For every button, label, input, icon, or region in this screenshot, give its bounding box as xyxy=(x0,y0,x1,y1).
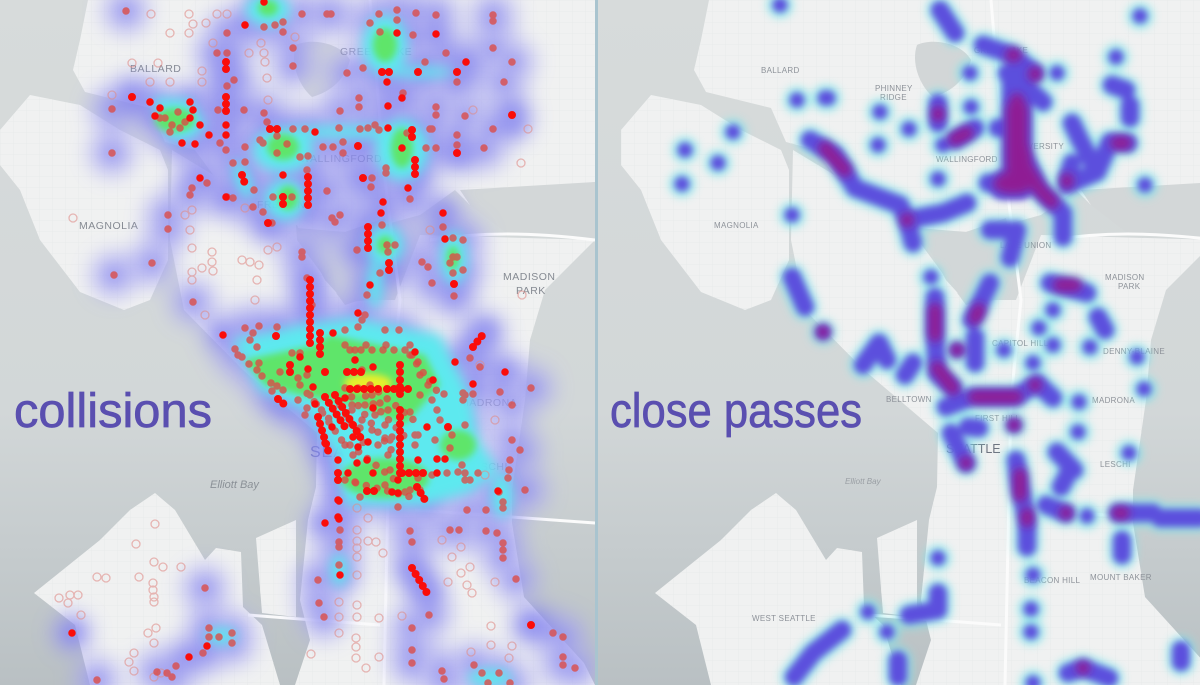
map place labels right: PHINNEY xyxy=(875,84,913,93)
heatmap: cyan band xyxy=(152,0,512,685)
map place labels left: FREMONT xyxy=(257,199,312,211)
pale hollow collision markers xyxy=(55,10,532,681)
heatmap: green core xyxy=(155,0,476,498)
map place labels left: BALLARD xyxy=(130,63,181,75)
map place labels left: LESCHI xyxy=(467,461,508,473)
solid collision runs xyxy=(132,62,535,625)
map place labels right: BELLTOWN xyxy=(886,395,932,404)
map place labels right: BALLARD xyxy=(761,66,800,75)
map place labels right: FIRST HILL xyxy=(975,414,1020,423)
divider between panels xyxy=(595,0,598,685)
base map left xyxy=(0,0,595,685)
blue routes and spots xyxy=(682,5,1200,683)
panel: close passes map xyxy=(598,0,1200,685)
map place labels right: MADISON xyxy=(1105,273,1144,282)
map place labels right: MOUNT BAKER xyxy=(1090,573,1152,582)
map place labels left: PARK xyxy=(516,285,546,297)
map place labels right: SEATTLE xyxy=(946,442,1001,456)
map place labels right: RIDGE xyxy=(880,93,907,102)
map place labels left xyxy=(79,46,556,491)
map place labels left: MADISON xyxy=(503,271,556,283)
water background right xyxy=(598,489,1200,685)
map place labels right: LAKE UNION xyxy=(1000,241,1051,250)
label: collisions: collisions xyxy=(14,385,212,438)
purple core xyxy=(823,55,1125,668)
map place labels right: LESCHI xyxy=(1100,460,1131,469)
heatmap: inner lavender halo xyxy=(72,2,575,683)
map place labels right: MAGNOLIA xyxy=(714,221,759,230)
map place labels right: MADRONA xyxy=(1092,396,1135,405)
heatmap: lavender glow xyxy=(72,2,575,683)
map place labels left: SEATTLE xyxy=(310,444,387,461)
map place labels right: BEACON HILL xyxy=(1024,576,1080,585)
map place labels right: WALLINGFORD xyxy=(936,155,998,164)
map place labels right: WEST SEATTLE xyxy=(752,614,816,623)
translucent dense downtown dots xyxy=(300,350,440,498)
panel: collisions map xyxy=(0,0,595,685)
cyan glow xyxy=(682,5,1200,683)
map place labels left: MADRONA xyxy=(460,397,517,409)
collision dots xyxy=(55,2,575,683)
translucent collision dots xyxy=(97,10,575,683)
map place labels left: GREEN LAKE xyxy=(340,46,412,58)
map place labels left: WALLINGFORD xyxy=(300,153,382,165)
map place labels right: PARK xyxy=(1118,282,1141,291)
map place labels left: MAGNOLIA xyxy=(79,220,138,232)
map place labels right: DENNY-BLAINE xyxy=(1103,347,1165,356)
map place labels right: UNIVERSITY xyxy=(1013,142,1064,151)
map place labels right: CAPITOL HILL xyxy=(992,339,1049,348)
solid collision points xyxy=(72,2,505,657)
heatmap: yellow hotspot xyxy=(344,374,392,392)
base map right xyxy=(621,0,1200,685)
water background left xyxy=(0,489,595,685)
label: close passes: close passes xyxy=(610,385,862,438)
map place labels right: GREEN LAKE xyxy=(974,46,1028,55)
heatmap: close-pass routes xyxy=(682,5,1200,683)
map place labels right: Elliott Bay xyxy=(845,477,882,486)
map place labels left: Elliott Bay xyxy=(210,479,260,491)
map place labels right xyxy=(714,46,1165,623)
